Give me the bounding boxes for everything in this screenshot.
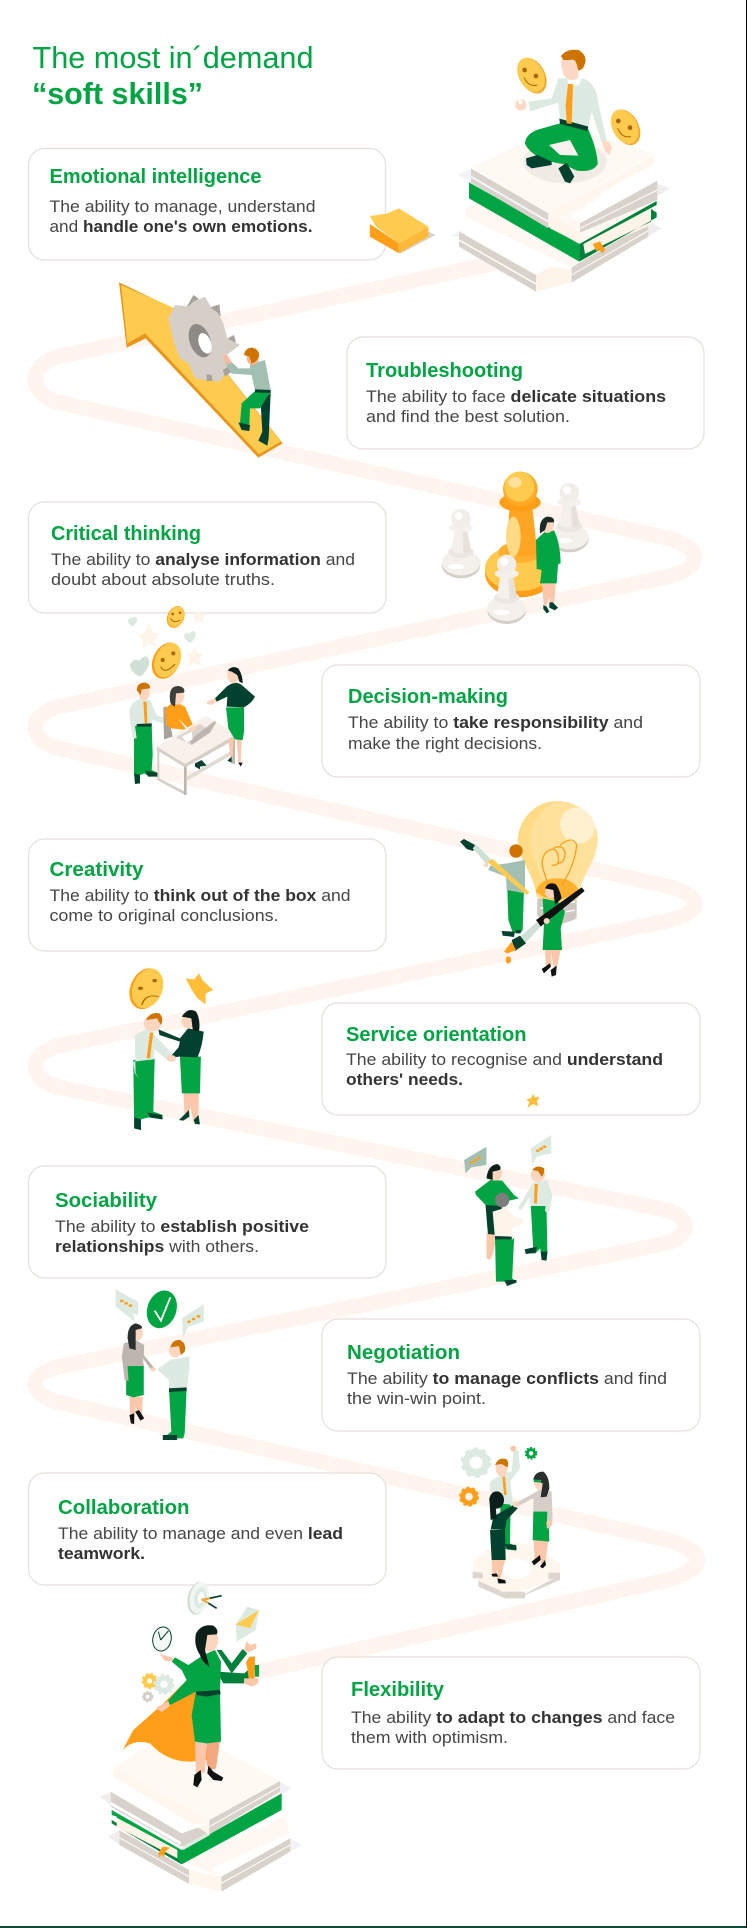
card: Collaboration: Collaboration xyxy=(58,1497,190,1519)
illustration: man meditating on books xyxy=(450,50,670,292)
speech bubble right xyxy=(182,1304,204,1337)
icon: star xyxy=(186,973,213,1004)
card: Sociability: relationships with others. xyxy=(55,1238,259,1256)
card: Negotiation: Negotiation xyxy=(347,1342,460,1364)
icon: clock xyxy=(150,1625,174,1653)
illustration: lightbulb and painters xyxy=(460,801,601,977)
icon: sticky note pad xyxy=(370,208,436,254)
gear xyxy=(168,295,240,382)
card: Service orientation: Service orientation xyxy=(346,1024,526,1046)
card: Creativity xyxy=(28,839,386,951)
card: Troubleshooting: The ability to face delicate situations xyxy=(366,388,666,406)
card: Decision-making: Decision-making xyxy=(348,686,508,708)
man xyxy=(515,50,612,183)
title: “soft skills” xyxy=(32,76,203,111)
desk xyxy=(157,716,237,795)
card: Sociability xyxy=(28,1166,386,1278)
woman xyxy=(536,517,561,613)
card: Critical thinking: The ability to analyse information and xyxy=(51,551,355,569)
card: Emotional intelligence: Emotional intelligence xyxy=(50,166,262,188)
icon: sad face xyxy=(125,966,168,1011)
card: Service orientation xyxy=(322,1003,700,1115)
card: Troubleshooting: Troubleshooting xyxy=(366,360,523,382)
card: Decision-making: make the right decisions. xyxy=(348,735,542,753)
card: Service orientation: others' needs. xyxy=(346,1071,463,1089)
card: Critical thinking: doubt about absolute truths. xyxy=(51,571,275,589)
bulb xyxy=(518,801,601,924)
man xyxy=(133,1013,176,1130)
card: Flexibility xyxy=(322,1657,700,1769)
card: Creativity: The ability to think out of the box and xyxy=(50,887,350,905)
card: Negotiation: The ability to manage conflicts and find xyxy=(347,1370,667,1388)
smiley right xyxy=(605,105,646,150)
card: Flexibility: Flexibility xyxy=(351,1679,445,1701)
man standing xyxy=(129,683,173,784)
pawn front xyxy=(487,555,526,624)
card: Troubleshooting: and find the best solution. xyxy=(366,408,570,426)
card: Collaboration xyxy=(28,1473,386,1585)
woman with pen xyxy=(504,883,585,977)
card: Collaboration: The ability to manage and even lead xyxy=(58,1525,343,1543)
card: Service orientation: The ability to recognise and understand xyxy=(346,1051,663,1069)
card: Sociability: Sociability xyxy=(55,1190,158,1212)
woman xyxy=(475,1164,519,1260)
card: Creativity: Creativity xyxy=(50,859,144,881)
speech bubble left xyxy=(116,1289,138,1322)
seated woman xyxy=(163,686,207,769)
illustration: superwoman on books xyxy=(100,1580,302,1892)
card: Collaboration: teamwork. xyxy=(58,1545,145,1563)
icon: small star on card xyxy=(526,1094,539,1108)
man with brush xyxy=(460,839,529,937)
speech bubble left xyxy=(464,1147,486,1173)
winding road xyxy=(35,262,698,1672)
big gold pawn xyxy=(485,472,555,597)
gear platform xyxy=(473,1542,560,1598)
man xyxy=(157,1340,189,1440)
pawn right xyxy=(550,483,589,552)
card: Sociability: The ability to establish positive xyxy=(55,1218,309,1236)
illustration: team on gear xyxy=(460,1446,560,1598)
card: Decision-making: The ability to take responsibility and xyxy=(348,714,643,732)
illustration: man pushing gear up arrow xyxy=(119,282,283,458)
illustration: chess pieces and woman xyxy=(442,472,589,624)
card: Flexibility: them with optimism. xyxy=(351,1729,508,1747)
speech bubble right xyxy=(531,1135,551,1165)
card: Negotiation xyxy=(322,1319,700,1431)
illustration: three people talking with speech bubbles xyxy=(464,1135,552,1286)
card: Emotional intelligence: The ability to manage, understand xyxy=(50,198,316,216)
floating hearts, stars and smileys xyxy=(128,603,206,684)
gears floating xyxy=(460,1448,537,1506)
woman in dark green xyxy=(489,1491,519,1583)
smiley left xyxy=(512,53,552,98)
man centre xyxy=(493,1193,524,1286)
title: The most in´demand xyxy=(32,40,314,75)
card: Negotiation: the win-win point. xyxy=(347,1390,486,1408)
icon: check badge xyxy=(143,1289,180,1330)
illustration: handshake with sad face and star xyxy=(125,966,213,1130)
illustration: office team at desk xyxy=(128,603,255,795)
pawn left xyxy=(442,509,480,578)
card: Emotional intelligence: and handle one's own emotions. xyxy=(50,218,312,236)
man right xyxy=(518,1167,552,1261)
icon: target xyxy=(184,1580,222,1617)
cape xyxy=(123,1678,210,1762)
man with raised arm xyxy=(490,1446,520,1551)
woman in grey xyxy=(518,1472,553,1568)
card: Troubleshooting xyxy=(347,337,704,449)
illustration: two people shaking hands with check mark xyxy=(116,1289,204,1440)
card: Critical thinking xyxy=(28,502,386,613)
woman xyxy=(122,1323,156,1424)
icon: gears xyxy=(142,1674,174,1702)
woman standing xyxy=(207,667,255,767)
woman xyxy=(156,1625,259,1787)
woman xyxy=(159,1010,204,1124)
books xyxy=(100,1742,302,1892)
icon: envelope xyxy=(236,1607,259,1642)
card: Emotional intelligence xyxy=(28,148,386,260)
card: Flexibility: The ability to adapt to changes and face xyxy=(351,1709,675,1727)
title xyxy=(32,40,314,111)
card: Critical thinking: Critical thinking xyxy=(51,523,201,545)
card: Decision-making xyxy=(322,665,700,777)
card: Creativity: come to original conclusions. xyxy=(50,907,278,925)
climbing man xyxy=(223,348,271,446)
